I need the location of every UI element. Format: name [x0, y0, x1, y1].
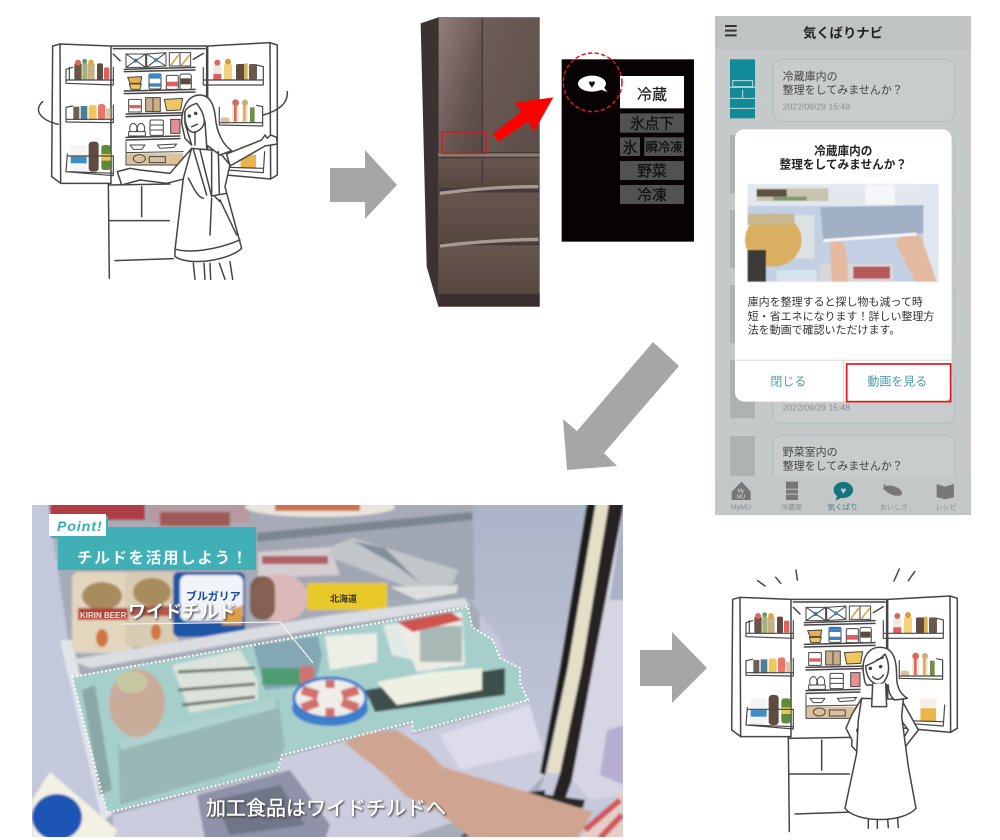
- vegetable compartment card: 整理をしてみませんか？: [783, 459, 903, 473]
- dashed red circle highlighting icon: [563, 53, 622, 112]
- bottom navigation bar: MU: [737, 494, 745, 500]
- modal body text: 短・省エネになります！詳しい整理方: [748, 309, 934, 323]
- button: ice: [620, 137, 640, 156]
- modal title: 整理をしてみませんか？: [780, 158, 907, 172]
- woman: [117, 95, 277, 279]
- red arrow to panel: [493, 97, 553, 142]
- caption: processed foods go to wide chilled: 加工食品はワイドチルドへ: [206, 797, 446, 820]
- app header: 気くばりナビ: [803, 24, 883, 40]
- arrow: step 1 to step 2: [330, 150, 397, 219]
- point label: Point!: [57, 518, 103, 534]
- modal body text: [748, 295, 934, 337]
- button: freezer: 冷凍: [637, 187, 667, 204]
- butter label: 北海道: [330, 593, 357, 604]
- modal photo of shelf being adjusted: [745, 184, 938, 282]
- black control panel: [562, 59, 694, 242]
- bottom navigation bar: 気くばり: [827, 501, 858, 511]
- woman: [845, 647, 918, 828]
- label: wide chilled: ワイドチルド: [128, 602, 236, 622]
- illustration: woman looking into a cluttered open fridge: [38, 43, 287, 279]
- photo of fridge interior: [30, 497, 625, 840]
- smartphone app screen: [715, 16, 971, 515]
- leader line: [122, 622, 313, 663]
- video still: wide chilled compartment: [30, 497, 625, 840]
- bottom navigation bar: My: [737, 488, 745, 494]
- banner: use the chilled room: [58, 527, 256, 570]
- modal dialog: [735, 129, 952, 402]
- partially hidden card: 2022/09/29 15:48: [783, 403, 850, 413]
- button: ice: 氷: [623, 139, 638, 156]
- icon: heart speech bubble: [578, 76, 607, 92]
- button: below-freezing: 氷点下: [630, 116, 674, 133]
- fridge with open doors: [732, 596, 957, 832]
- bottom navigation bar: [715, 476, 971, 515]
- app header: [715, 16, 971, 50]
- button: below-freezing: [620, 113, 684, 133]
- refrigerator body: [421, 17, 540, 307]
- modal button separators: [735, 360, 952, 402]
- button: refrigerator selected: 冷蔵: [637, 86, 667, 103]
- sparkle marks: [758, 569, 915, 586]
- side edges of hidden cards: [952, 138, 955, 343]
- button: refrigerator selected: [620, 76, 684, 108]
- banner: use the chilled room: チルドを活用しよう！: [77, 549, 249, 567]
- door-swing motion marks: [38, 92, 287, 124]
- vegetable compartment card: [730, 435, 955, 488]
- modal body text: 庫内を整理すると探し物も減って時: [748, 295, 923, 309]
- icon: heart speech bubble: ♥: [588, 77, 596, 91]
- notification list card: 2022/09/29 15:49: [783, 101, 850, 111]
- background grey fridge icons: [730, 135, 755, 418]
- bottom navigation bar: おいしさ: [880, 503, 908, 511]
- notification list card: 整理をしてみませんか？: [783, 83, 903, 97]
- red highlight box on the door: [442, 132, 486, 153]
- bottom navigation bar: 冷蔵庫: [781, 502, 802, 511]
- button: flash freeze: 瞬冷凍: [645, 140, 682, 154]
- bottom navigation bar: MyMU: [731, 504, 751, 511]
- fridge with open doors: [52, 43, 277, 278]
- bottom navigation bar: ♥: [840, 486, 846, 497]
- red highlight around watch video button: [847, 364, 951, 402]
- button: vegetables: 野菜: [637, 163, 667, 180]
- modal body text: 法を動画で確認いただけます。: [748, 323, 900, 337]
- notification list card: [730, 59, 955, 122]
- refrigerator product photo with control panel callout: [421, 17, 694, 307]
- modal title: [780, 144, 907, 172]
- button: close: 閉じる: [770, 375, 806, 389]
- button: flash freeze: [644, 137, 684, 156]
- yogurt label: ブルガリア: [186, 589, 241, 603]
- app background: [715, 16, 971, 515]
- can label: Kirin beer: KIRIN BEER: [80, 611, 126, 620]
- arrow: app to video: [563, 342, 679, 470]
- illustration: smiling woman in front of organized fridge: [732, 569, 957, 832]
- arrow: video to result: [640, 632, 707, 703]
- button: vegetables: [620, 161, 684, 180]
- modal title: 冷蔵庫内の: [814, 144, 872, 158]
- button: freezer: [620, 185, 684, 204]
- vegetable compartment card: 野菜室内の: [783, 445, 838, 459]
- bottom navigation bar: レシピ: [935, 503, 956, 511]
- partially hidden card: [773, 377, 955, 423]
- button: watch video: 動画を見る: [867, 375, 927, 389]
- point label: [49, 514, 108, 538]
- white dotted outline of wide chilled compartment: [72, 607, 528, 813]
- notification list card: 冷蔵庫内の: [783, 69, 838, 83]
